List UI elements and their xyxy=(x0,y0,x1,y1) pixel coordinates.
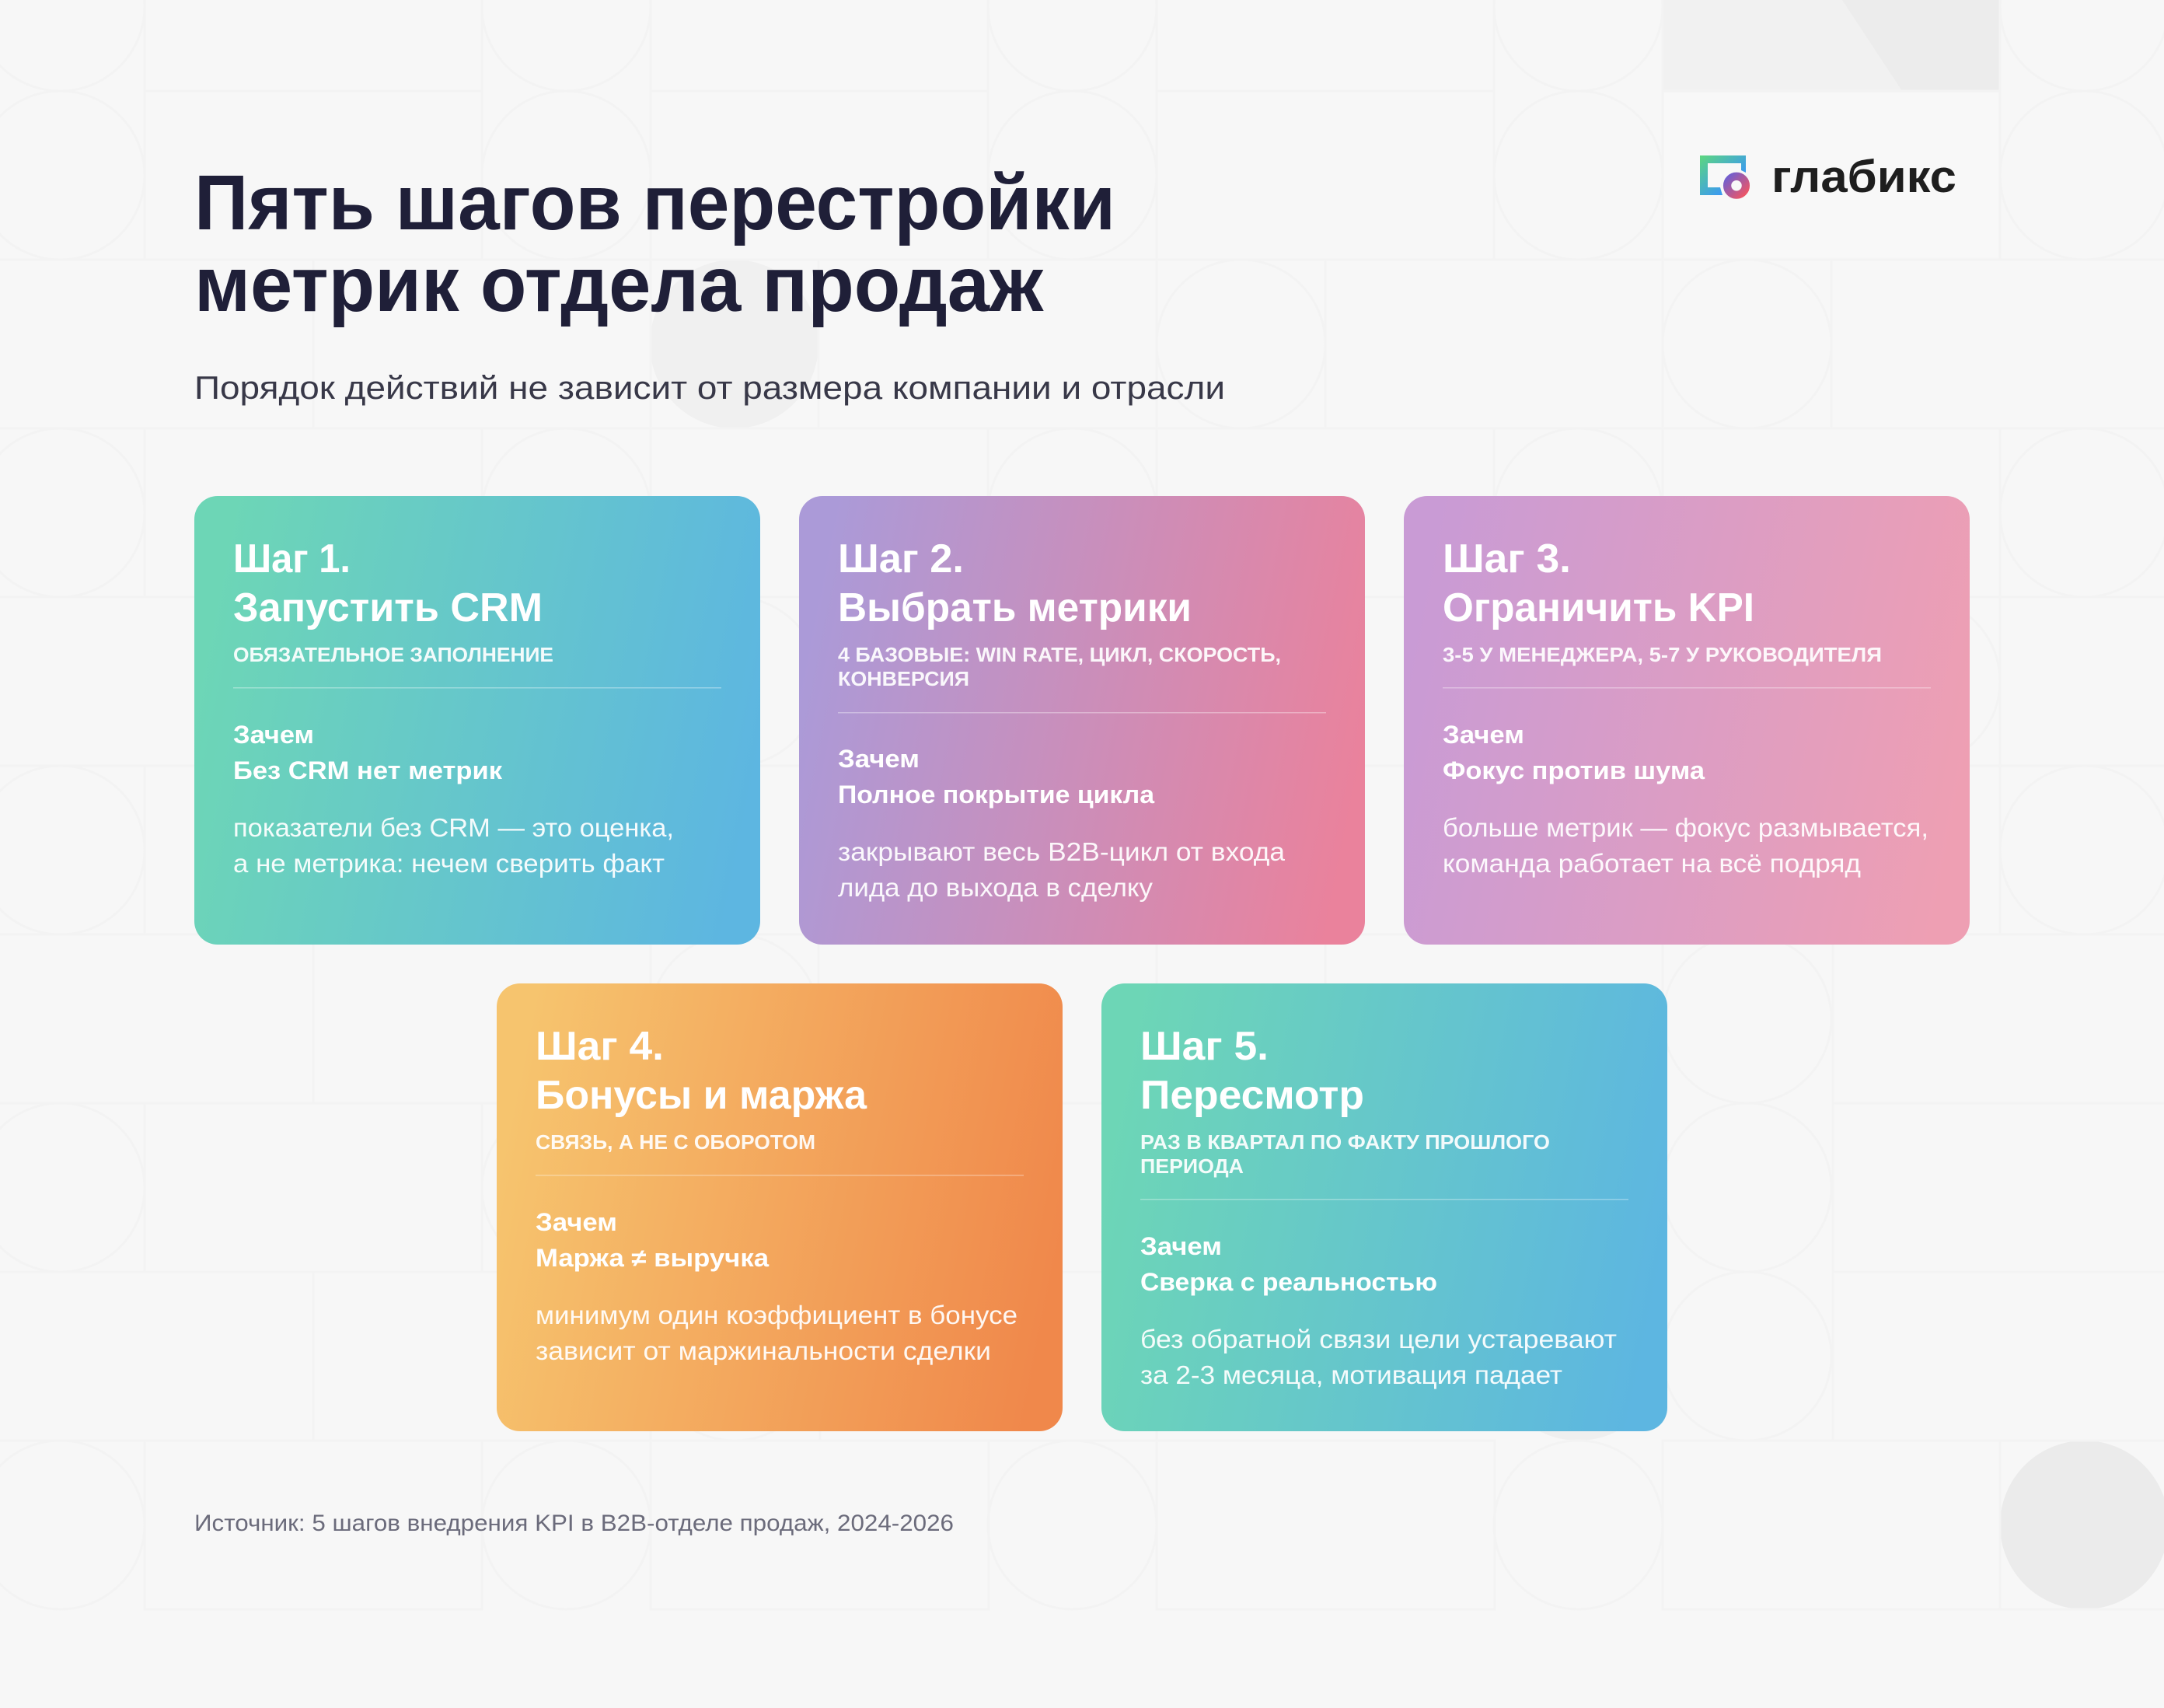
step 5 body: за 2-3 месяца, мотивация падает xyxy=(1140,1360,1562,1389)
step 5 reason: Зачем xyxy=(1140,1232,1222,1260)
subtitle: Порядок действий не зависит от размера компании и отрасли xyxy=(194,369,1225,406)
step 3 body: больше метрик — фокус размывается, xyxy=(1443,813,1928,842)
step 5 body: без обратной связи цели устаревают xyxy=(1140,1325,1617,1353)
step 4 heading: Бонусы и маржа xyxy=(536,1073,867,1118)
title: Пять шагов перестройки xyxy=(194,159,1115,246)
step 1 heading: Запустить CRM xyxy=(233,585,543,630)
logo xyxy=(1700,152,1956,202)
step 5 heading xyxy=(1140,1024,1364,1118)
step 5 note: РАЗ В КВАРТАЛ ПО ФАКТУ ПРОШЛОГО xyxy=(1140,1130,1550,1154)
step 1 note: ОБЯЗАТЕЛЬНОЕ ЗАПОЛНЕНИЕ xyxy=(233,643,553,666)
step 4 body: минимум один коэффициент в бонусе xyxy=(536,1301,1017,1329)
step 2 note: 4 БАЗОВЫЕ: WIN RATE, ЦИКЛ, СКОРОСТЬ, xyxy=(838,643,1281,666)
step 4 heading: Шаг 4. xyxy=(536,1024,664,1069)
step 2 reason: Зачем xyxy=(838,745,920,773)
panel: step 1 xyxy=(194,496,760,945)
step 4 body xyxy=(536,1301,1017,1365)
icon: logo mark xyxy=(1700,155,1746,195)
step 2 heading: Шаг 2. xyxy=(838,536,964,582)
step 3 body xyxy=(1443,813,1928,878)
step 2 reason xyxy=(838,745,1154,809)
title: метрик отдела продаж xyxy=(194,241,1044,328)
step 4 reason xyxy=(536,1208,769,1272)
title xyxy=(194,159,1115,328)
step 1 reason xyxy=(233,721,503,784)
step 3 reason: Фокус против шума xyxy=(1443,756,1705,784)
panel: step 3 xyxy=(1404,496,1970,945)
step 3 reason xyxy=(1443,721,1705,784)
step 5 reason xyxy=(1140,1232,1437,1296)
panel: step 5 xyxy=(1101,983,1667,1431)
step 3 note: 3-5 У МЕНЕДЖЕРА, 5-7 У РУКОВОДИТЕЛЯ xyxy=(1443,643,1882,666)
step 2 note: КОНВЕРСИЯ xyxy=(838,667,969,690)
step 1 reason: Без CRM нет метрик xyxy=(233,756,503,784)
step 5 body xyxy=(1140,1325,1617,1389)
step 1 body xyxy=(233,813,674,878)
step 5 note xyxy=(1140,1130,1550,1178)
step 5 heading: Шаг 5. xyxy=(1140,1024,1269,1069)
step 5 reason: Сверка с реальностью xyxy=(1140,1268,1437,1296)
step 1 heading xyxy=(233,536,543,630)
step 1 reason: Зачем xyxy=(233,721,314,749)
step 1 body: показатели без CRM — это оценка, xyxy=(233,813,674,842)
step 4 reason: Зачем xyxy=(536,1208,617,1236)
step 3 heading xyxy=(1443,536,1754,630)
step 1 heading: Шаг 1. xyxy=(233,536,351,582)
step 3 body: команда работает на всё подряд xyxy=(1443,849,1861,878)
step 3 heading: Ограничить KPI xyxy=(1443,585,1754,630)
panel: step 4 xyxy=(497,983,1063,1431)
source footnote: Источник: 5 шагов внедрения KPI в B2B-отделе продаж, 2024-2026 xyxy=(194,1511,954,1536)
step 5 heading: Пересмотр xyxy=(1140,1073,1364,1118)
panel: step 2 xyxy=(799,496,1365,945)
step 2 body xyxy=(838,837,1286,902)
step 2 body: закрывают весь B2B-цикл от входа xyxy=(838,837,1286,866)
step 4 heading xyxy=(536,1024,867,1118)
step 3 reason: Зачем xyxy=(1443,721,1524,749)
step 5 note: ПЕРИОДА xyxy=(1140,1154,1244,1178)
step 1 body: а не метрика: нечем сверить факт xyxy=(233,849,665,878)
step 4 reason: Маржа ≠ выручка xyxy=(536,1244,769,1272)
step 3 heading: Шаг 3. xyxy=(1443,536,1571,582)
step 2 note xyxy=(838,643,1281,690)
step 2 reason: Полное покрытие цикла xyxy=(838,781,1154,809)
step 2 body: лида до выхода в сделку xyxy=(838,873,1154,902)
logo wordmark: глабикс xyxy=(1771,152,1956,202)
step 4 body: зависит от маржинальности сделки xyxy=(536,1336,991,1365)
step 2 heading: Выбрать метрики xyxy=(838,585,1192,630)
step 4 note: СВЯЗЬ, А НЕ С ОБОРОТОМ xyxy=(536,1130,815,1154)
step 2 heading xyxy=(838,536,1192,630)
